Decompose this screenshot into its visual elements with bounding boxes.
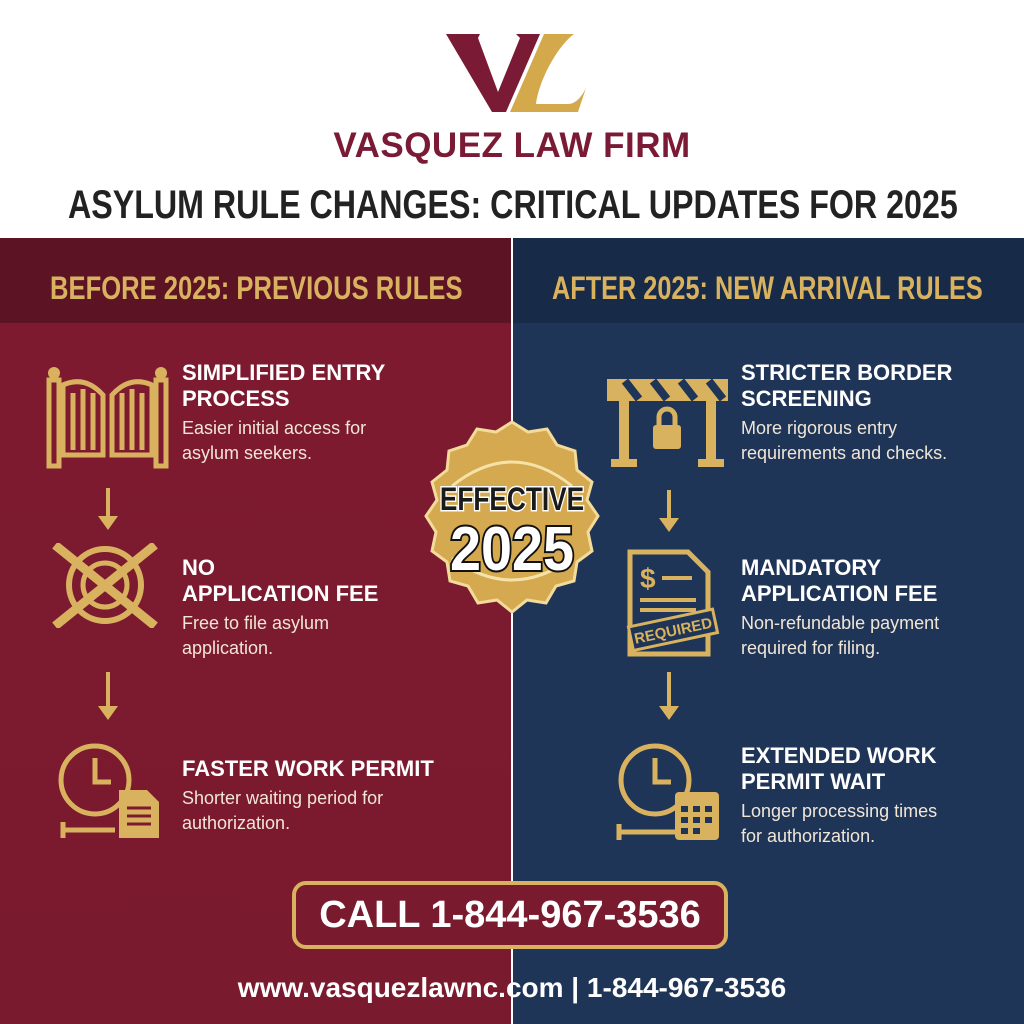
text: faster work permit: authorization. [182,813,290,833]
call button [292,881,728,949]
logo [446,34,586,112]
text: faster work permit: FASTER WORK PERMIT [182,756,434,781]
text: mandatory fee: APPLICATION FEE [741,581,937,606]
call button: CALL 1-844-967-3536 [319,894,701,936]
text: stricter screening: SCREENING [741,386,872,411]
title: ASYLUM RULE CHANGES: CRITICAL UPDATES FOR 2025 [68,183,958,227]
text: extended wait: Longer processing times [741,801,937,821]
arrow [659,672,679,720]
text: faster work permit: Shorter waiting period for [182,788,383,808]
icon: no fee [52,543,158,628]
arrow [98,488,118,530]
text: no fee: Free to file asylum [182,613,329,633]
text: no fee: application. [182,638,273,658]
icon: required document: $ [640,563,656,594]
icon: clock calendar [616,744,719,840]
text: extended wait: PERMIT WAIT [741,769,885,794]
badge: 2025 [450,515,574,584]
firm name: VASQUEZ LAW FIRM [333,126,691,165]
icon: clock document [58,744,159,838]
text: mandatory fee [741,555,939,658]
text: no fee: APPLICATION FEE [182,581,378,606]
text: no fee [182,555,378,658]
badge [424,420,600,614]
text: extended wait: EXTENDED WORK [741,743,937,768]
text: extended wait [741,743,937,846]
arrow [659,490,679,532]
panel header: before: BEFORE 2025: PREVIOUS RULES [50,270,463,306]
text: simplified entry [182,360,385,463]
text: simplified entry: PROCESS [182,386,290,411]
panel: before [0,238,511,1024]
panel header: before [0,238,511,323]
panel header: after: AFTER 2025: NEW ARRIVAL RULES [552,270,983,306]
footer contact: www.vasquezlawnc.com | 1-844-967-3536 [238,972,786,1003]
text: stricter screening: requirements and checks. [741,443,947,463]
text: extended wait: for authorization. [741,826,875,846]
icon: required document: REQUIRED [633,615,714,648]
panel header: after [513,238,1024,323]
badge: EFFECTIVE [440,483,584,518]
icon: barrier [607,379,728,467]
icon: required document [626,550,720,656]
text: stricter screening: More rigorous entry [741,418,897,438]
icon: gate [46,367,168,468]
text: simplified entry: asylum seekers. [182,443,312,463]
text: mandatory fee: Non-refundable payment [741,613,939,633]
text: no fee: NO [182,555,215,580]
text: stricter screening [741,360,952,463]
text: stricter screening: STRICTER BORDER [741,360,952,385]
text: simplified entry: SIMPLIFIED ENTRY [182,360,385,385]
text: mandatory fee: MANDATORY [741,555,881,580]
arrow [98,672,118,720]
text: simplified entry: Easier initial access for [182,418,366,438]
text: faster work permit [182,756,434,833]
text: mandatory fee: required for filing. [741,638,880,658]
panel: after [513,238,1024,1024]
